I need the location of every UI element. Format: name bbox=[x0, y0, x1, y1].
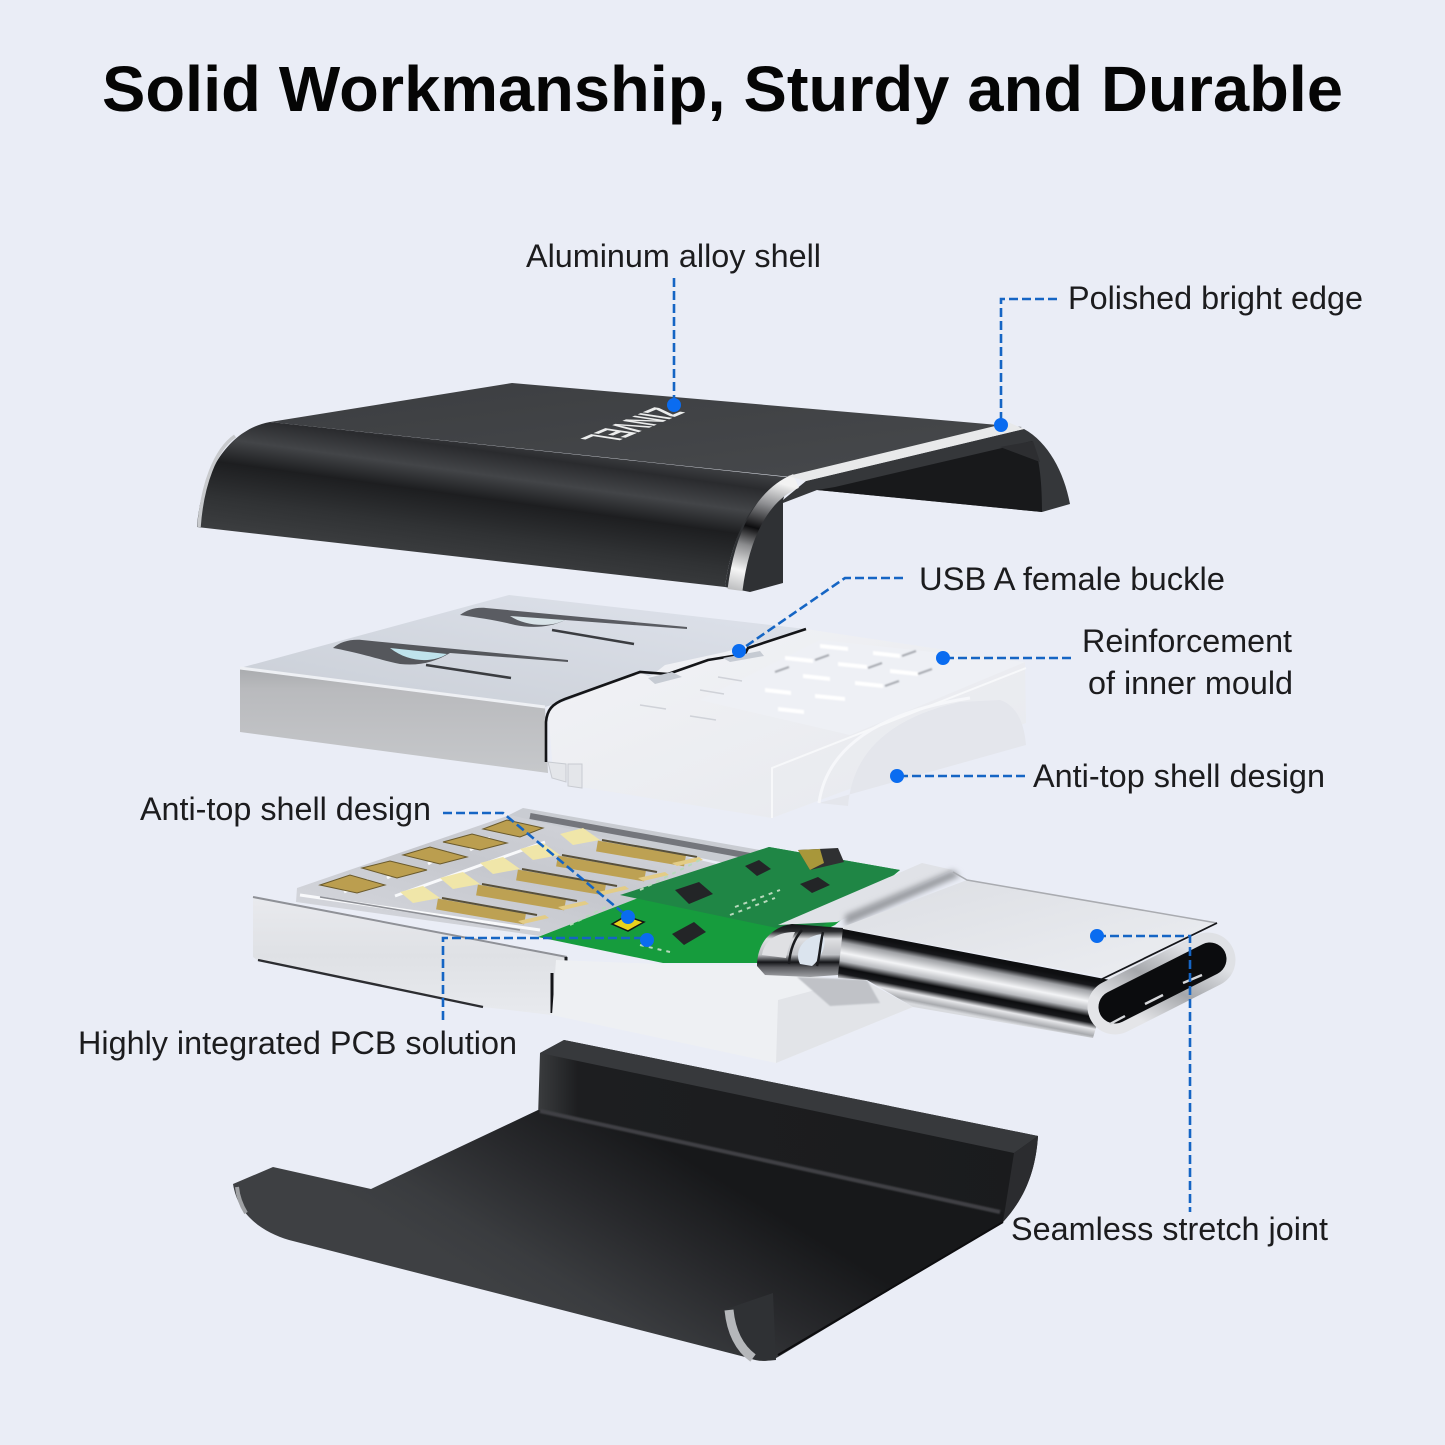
lip end cap bbox=[723, 1293, 776, 1361]
USB-A metal shell and inner mould bbox=[240, 595, 1026, 818]
logo text: ZINVEL bbox=[570, 405, 696, 445]
callout: polished bright edge: Polished bright edge bbox=[1068, 280, 1363, 316]
callout: reinforcement of inner mould: of inner mould bbox=[1088, 665, 1293, 701]
PCB components bbox=[672, 860, 830, 945]
callout: polished bright edge bbox=[994, 280, 1363, 432]
title: Solid Workmanship, Sturdy and Durable bbox=[102, 53, 1343, 125]
callout: seamless stretch joint: Seamless stretch joint bbox=[1011, 1211, 1328, 1247]
callout: USB A female buckle bbox=[732, 561, 1225, 658]
PCB board bbox=[538, 847, 900, 963]
white inner mould bbox=[548, 629, 1026, 818]
shell top face bbox=[270, 383, 1022, 478]
callout: anti-top shell design right bbox=[890, 758, 1325, 794]
callout: reinforcement of inner mould bbox=[936, 623, 1293, 701]
shell front face bbox=[197, 422, 795, 587]
callout: anti-top shell design left bbox=[140, 791, 635, 924]
floor and curved lip bbox=[233, 1110, 1003, 1361]
gold contact fingers bbox=[437, 846, 685, 919]
callout: highly integrated PCB solution bbox=[78, 933, 654, 1061]
slot: front bbox=[333, 640, 568, 665]
shell front leg bbox=[725, 478, 790, 592]
dark seam bbox=[778, 1222, 1003, 1355]
polished left edge bbox=[199, 436, 235, 527]
USB-C collar bbox=[757, 924, 843, 977]
shell underside band bbox=[783, 429, 1070, 512]
USB-C port opening bbox=[1115, 959, 1210, 1007]
callout: aluminum alloy shell: Aluminum alloy shell bbox=[526, 238, 821, 274]
gold contact feet bbox=[518, 857, 703, 924]
seam line bbox=[546, 629, 806, 762]
callout: highly integrated PCB solution: Highly integrated PCB solution bbox=[78, 1025, 517, 1061]
shell inner back wall bbox=[817, 441, 1042, 512]
USB-C port ring bbox=[1115, 960, 1208, 1007]
callout: anti-top shell design left: Anti-top shell design bbox=[140, 791, 431, 827]
USB-C top plate bbox=[778, 863, 953, 925]
slot: back bbox=[460, 608, 687, 629]
USB-C assembly with PCB bbox=[253, 808, 1217, 1063]
callout: reinforcement of inner mould: Reinforcement bbox=[1082, 623, 1292, 659]
callout: USB A female buckle: USB A female buckle bbox=[919, 561, 1225, 597]
polished lip edge bbox=[729, 1310, 753, 1358]
metal shell top bbox=[240, 595, 806, 707]
metal shell front bbox=[240, 668, 548, 773]
polished bright strip bbox=[788, 423, 1024, 481]
wall crease highlight bbox=[540, 1111, 1000, 1212]
white housing left bbox=[253, 897, 567, 1015]
gold contact pads bbox=[320, 820, 543, 893]
metal tray back rail bbox=[503, 808, 760, 866]
callout: seamless stretch joint bbox=[1011, 929, 1328, 1247]
metal tabs bbox=[648, 651, 764, 684]
polished front edge bbox=[735, 481, 796, 590]
bottom aluminum shell bbox=[233, 1040, 1038, 1361]
mould ridges bbox=[765, 644, 932, 714]
USB-C chrome side bbox=[838, 928, 1110, 1038]
under-collar moulding bbox=[797, 977, 880, 1006]
back wall bbox=[538, 1040, 1038, 1222]
white housing right bbox=[552, 960, 913, 1063]
callout: aluminum alloy shell bbox=[526, 238, 821, 412]
gold contact joints bbox=[400, 828, 600, 903]
top aluminum shell bbox=[197, 383, 1070, 592]
callout: anti-top shell design right: Anti-top shell design bbox=[1033, 758, 1325, 794]
contact tray bbox=[296, 815, 725, 936]
